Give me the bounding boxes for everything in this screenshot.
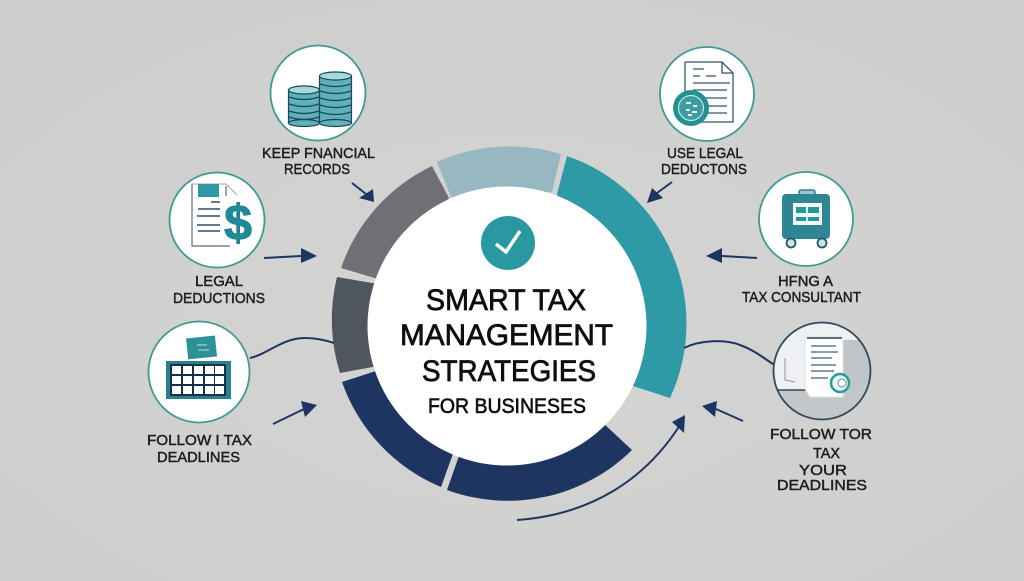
label: follow for tax your deadlines: DEADLINES <box>777 477 867 494</box>
segment: gray <box>341 166 449 279</box>
arrow: curved bottom <box>517 415 685 520</box>
donut ring <box>332 146 686 501</box>
title: MANAGEMENT <box>400 319 613 352</box>
arrow: to hiring consultant <box>706 248 757 263</box>
segment: light blue <box>437 146 561 197</box>
label: follow for tax your deadlines: FOLLOW TOR <box>770 426 872 443</box>
arrow: to keep records <box>352 183 374 202</box>
segment: dark gray <box>332 277 378 373</box>
label: use legal deductions: DEDUCTONS <box>661 161 747 178</box>
icon: suitcase <box>759 172 853 266</box>
label: hiring a tax consultant <box>742 273 861 306</box>
label: keep financial records <box>262 145 375 178</box>
center circle <box>368 186 646 466</box>
label: legal deductions: DEDUCTIONS <box>173 290 265 307</box>
title <box>400 284 613 418</box>
label: follow tax deadlines <box>147 432 252 466</box>
label: use legal deductions: USE LEGAL <box>667 145 743 162</box>
icon: coins <box>270 46 366 140</box>
label: use legal deductions <box>661 145 747 178</box>
label: keep financial records: RECORDS <box>284 161 350 178</box>
title: SMART TAX <box>426 284 586 317</box>
label: follow for tax your deadlines <box>770 426 872 494</box>
label: follow for tax your deadlines: TAX <box>813 445 840 462</box>
label: follow for tax your deadlines: YOUR <box>799 462 847 479</box>
label: keep financial records: KEEP FNANCIAL <box>262 145 375 162</box>
arrow: to follow tax <box>273 401 317 424</box>
label: hiring a tax consultant: HFNG A <box>778 273 833 290</box>
segment: navy lower right <box>447 423 632 501</box>
icon: document with dollar: $ <box>224 195 252 251</box>
label: follow tax deadlines: DEADLINES <box>157 449 240 466</box>
arrow: to use legal <box>647 182 672 203</box>
connector: right curve <box>684 341 773 364</box>
title: STRATEGIES <box>422 355 596 388</box>
arrow: to legal deductions <box>264 248 317 263</box>
icon: document with dollar <box>170 172 264 268</box>
title: FOR BUSINESES <box>428 395 586 418</box>
label: follow tax deadlines: FOLLOW I TAX <box>147 432 252 449</box>
segment: teal <box>557 156 686 398</box>
arrow: to lower right <box>702 401 743 421</box>
icon: document with seal <box>660 47 754 141</box>
connector: left curve <box>250 338 334 358</box>
label: legal deductions: LEGAL <box>195 273 243 290</box>
label: hiring a tax consultant: TAX CONSULTANT <box>742 289 861 306</box>
icon: document on desk <box>772 322 872 420</box>
check badge <box>481 216 535 270</box>
icon: calendar <box>148 322 250 422</box>
segment: navy lower left <box>342 370 454 487</box>
label: legal deductions <box>173 273 265 307</box>
